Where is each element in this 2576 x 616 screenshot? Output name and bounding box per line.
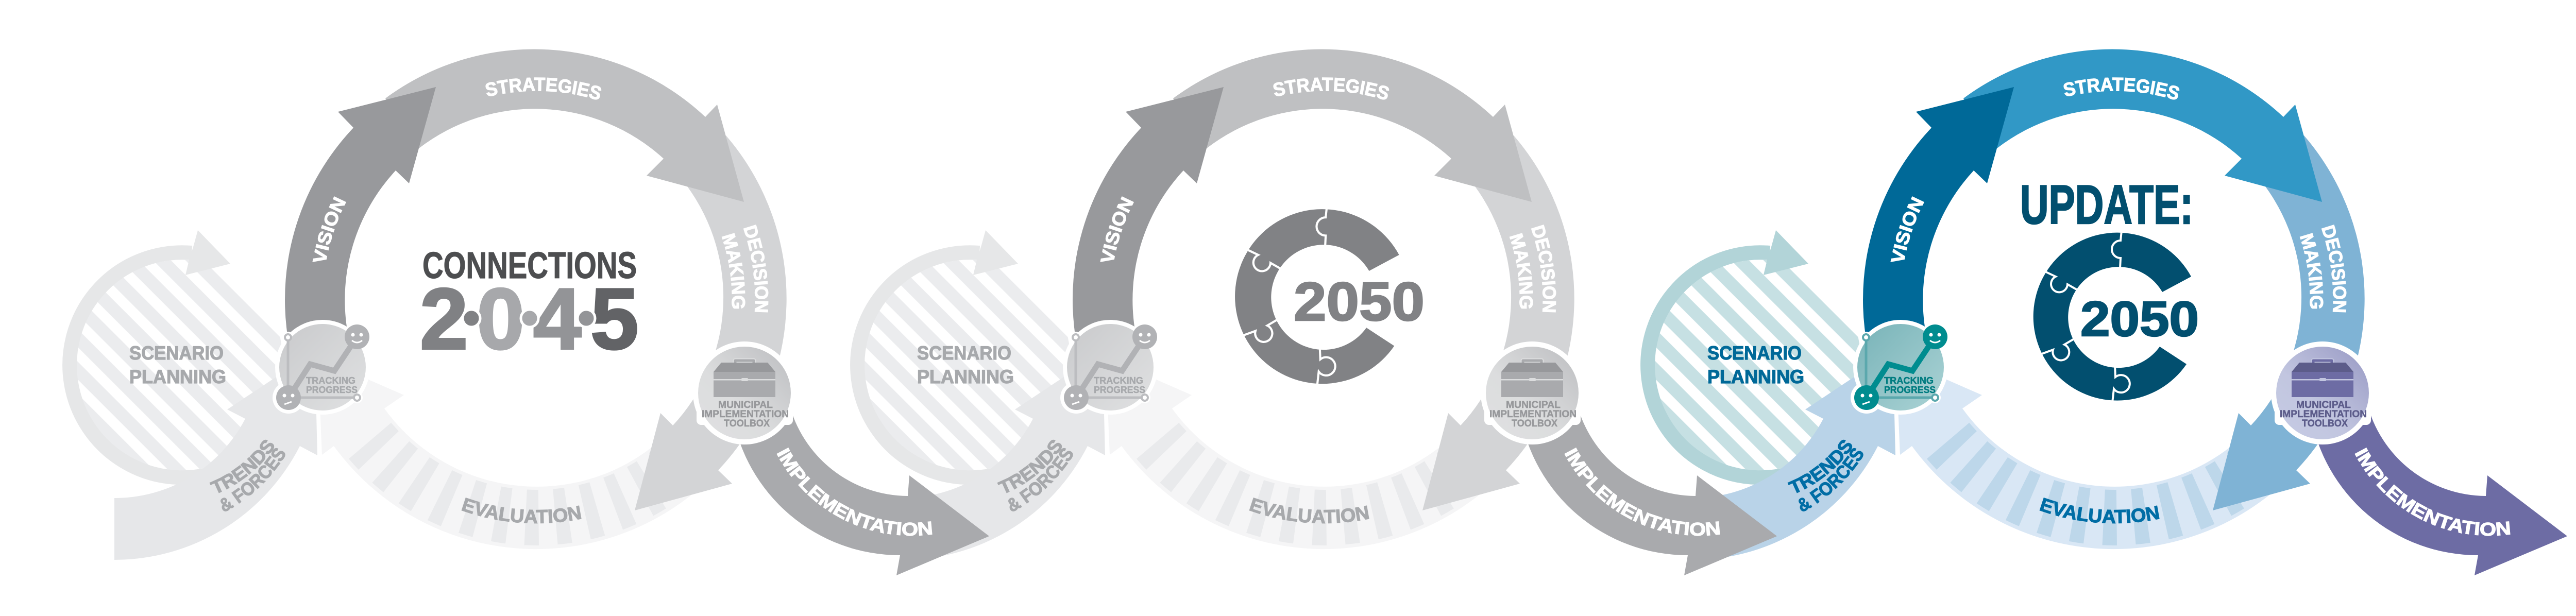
scenario planning loop xyxy=(857,230,1069,477)
badge: municipal implementation toolbox: MUNICIPAL xyxy=(1506,399,1561,410)
badge: tracking progress xyxy=(1851,320,1948,415)
scenario planning loop xyxy=(1648,230,1859,477)
arrow: evaluation xyxy=(320,380,691,549)
arrow: trends and forces: & FORCES xyxy=(221,448,285,511)
arrow: strategies: STRATEGIES xyxy=(1273,77,1389,100)
arrow: decision making: MAKING xyxy=(2300,233,2324,309)
arrow: vision: VISION xyxy=(312,196,346,262)
arrow: evaluation: EVALUATION xyxy=(462,498,582,523)
scenario planning loop xyxy=(70,230,281,477)
arrow: vision xyxy=(1863,87,2014,333)
arrow: decision making: DECISION xyxy=(743,225,769,312)
panel: Connections 2045 cycle xyxy=(62,49,989,575)
scenario planning loop: PLANNING xyxy=(1707,366,1804,387)
badge: municipal implementation toolbox: IMPLEMENTATION xyxy=(2280,408,2367,420)
badge: tracking progress: PROGRESS xyxy=(1884,384,1936,395)
arrow: implementation: IMPLEMENTATION xyxy=(2354,447,2511,536)
badge: municipal implementation toolbox: IMPLEMENTATION xyxy=(702,408,789,420)
arrow: trends and forces: & FORCES xyxy=(1008,448,1073,511)
logo: puzzle ring 2050: 2050 xyxy=(1294,271,1425,332)
badge: municipal implementation toolbox: IMPLEMENTATION xyxy=(1489,408,1577,420)
arrow: implementation xyxy=(741,416,989,575)
panel: 2050 cycle xyxy=(850,49,1777,575)
arrow: decision making xyxy=(2213,135,2365,510)
badge: tracking progress xyxy=(1060,320,1158,415)
arrow: trends and forces xyxy=(935,380,1105,556)
badge: tracking progress: TRACKING xyxy=(1884,375,1934,386)
arrow: trends and forces xyxy=(114,380,317,560)
badge: municipal implementation toolbox xyxy=(1481,341,1584,444)
arrow: decision making: DECISION xyxy=(1531,225,1556,312)
arrow: trends and forces: TRENDS xyxy=(997,440,1062,493)
logo: puzzle ring 2050 xyxy=(1235,207,1425,386)
badge: municipal implementation toolbox: MUNICIPAL xyxy=(2296,399,2351,410)
arrow: trends and forces: & FORCES xyxy=(1799,448,1863,511)
arrow: implementation: IMPLEMENTATION xyxy=(776,447,933,536)
arrow: strategies: STRATEGIES xyxy=(2063,77,2179,100)
arrow: trends and forces: TRENDS xyxy=(209,440,274,493)
scenario planning loop: SCENARIO xyxy=(1707,343,1802,364)
arrow: evaluation xyxy=(1898,380,2270,549)
arrow: implementation xyxy=(1528,416,1777,575)
logo: Connections 2045: 0 xyxy=(477,270,524,367)
scenario planning loop: PLANNING xyxy=(917,366,1014,387)
arrow: vision xyxy=(1073,87,1224,333)
badge: municipal implementation toolbox: TOOLBOX xyxy=(1512,418,1557,429)
badge: municipal implementation toolbox xyxy=(693,341,796,444)
arrow: decision making: MAKING xyxy=(1510,233,1533,309)
logo: Connections 2045: CONNECTIONS xyxy=(422,245,637,286)
arrow: vision: VISION xyxy=(1890,196,1924,262)
arrow: implementation: IMPLEMENTATION xyxy=(1564,447,1720,536)
scenario planning loop: SCENARIO xyxy=(129,343,224,364)
badge: tracking progress: PROGRESS xyxy=(1094,384,1145,395)
logo: Connections 2045: 2 xyxy=(420,270,468,367)
scenario planning loop: PLANNING xyxy=(129,366,226,387)
badge: municipal implementation toolbox: TOOLBOX xyxy=(2302,418,2348,429)
badge: municipal implementation toolbox: MUNICIPAL xyxy=(718,399,773,410)
badge: tracking progress: TRACKING xyxy=(1094,375,1143,386)
logo: Connections 2045: 5 xyxy=(590,270,638,367)
arrow: evaluation: EVALUATION xyxy=(1249,498,1369,523)
arrow: trends and forces: TRENDS xyxy=(1788,440,1853,493)
badge: tracking progress xyxy=(273,320,370,415)
arrow: evaluation: EVALUATION xyxy=(2039,498,2160,523)
logo: puzzle ring 2050: 2050 xyxy=(2080,292,2199,347)
arrow: vision xyxy=(285,87,436,333)
arrow: strategies xyxy=(385,49,744,202)
arrow: strategies xyxy=(1173,49,1532,202)
arrow: vision: VISION xyxy=(1100,196,1134,262)
logo: puzzle ring 2050 xyxy=(2033,231,2199,403)
logo: Connections 2045 xyxy=(420,245,638,367)
arrow: decision making: MAKING xyxy=(721,233,745,309)
logo: Connections 2045: 4 xyxy=(533,270,581,367)
arrow: strategies: STRATEGIES xyxy=(485,77,602,100)
arrow: decision making xyxy=(1422,135,1574,510)
arrow: decision making xyxy=(635,135,787,510)
heading: update: UPDATE: xyxy=(2020,174,2193,235)
arrow: trends and forces xyxy=(1723,377,1895,557)
badge: tracking progress: TRACKING xyxy=(306,375,355,386)
arrow: implementation xyxy=(2318,416,2567,575)
badge: municipal implementation toolbox xyxy=(2271,341,2374,444)
arrow: decision making: DECISION xyxy=(2321,225,2346,312)
badge: tracking progress: PROGRESS xyxy=(306,384,358,395)
arrow: evaluation xyxy=(1108,380,1479,549)
arrow: strategies xyxy=(1963,49,2322,202)
panel: Update 2050 cycle xyxy=(1640,49,2567,575)
badge: municipal implementation toolbox: TOOLBOX xyxy=(724,418,770,429)
scenario planning loop: SCENARIO xyxy=(917,343,1011,364)
